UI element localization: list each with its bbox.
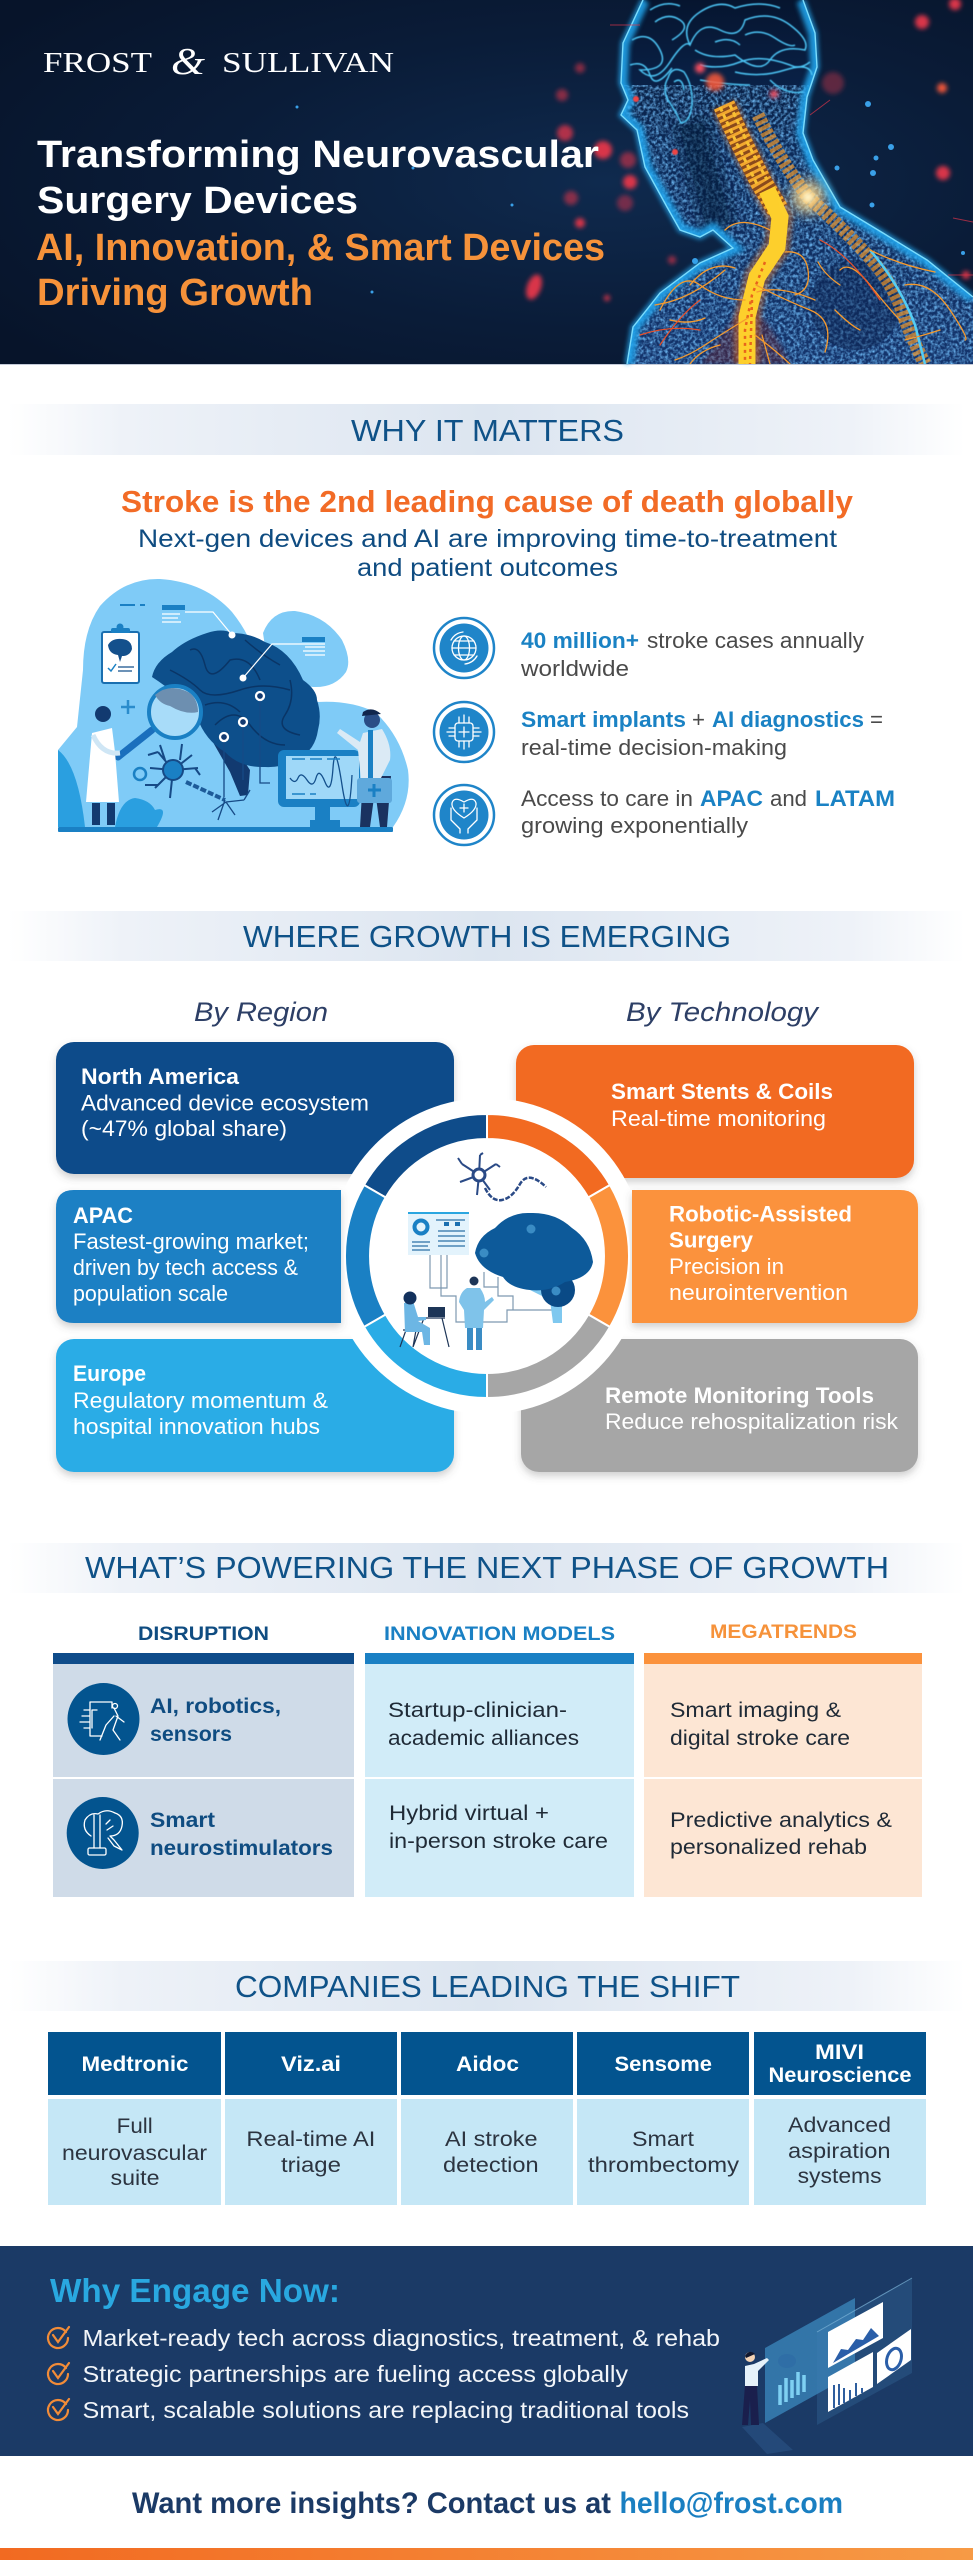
company names: Neuroscience xyxy=(768,2063,912,2087)
icon: neurostimulator xyxy=(67,1797,139,1869)
card: Smart Stents and Coils xyxy=(516,1045,914,1178)
illustration: doctors examining brain xyxy=(58,579,409,832)
stat: smart implants: AI diagnostics xyxy=(712,707,864,732)
stat: access to care: APAC xyxy=(700,786,763,811)
contact line xyxy=(132,2487,843,2520)
hub backing circle xyxy=(329,1098,645,1414)
wires xyxy=(430,1255,553,1322)
logo: Frost & Sullivan: FROST xyxy=(43,48,152,79)
company names: Medtronic xyxy=(82,2052,189,2076)
checklist xyxy=(48,2325,720,2423)
company names: Viz.ai xyxy=(281,2052,341,2076)
card: APAC xyxy=(56,1190,341,1323)
stat: smart implants: + xyxy=(692,707,705,732)
card: APAC: driven by tech access & xyxy=(73,1255,298,1280)
neurostimulators label: Smart xyxy=(150,1808,215,1832)
panel: innovation models: in-person stroke care xyxy=(389,1829,608,1853)
stat: smart implants: = xyxy=(870,707,883,732)
figure: left doctor xyxy=(86,706,120,825)
icon: AI robotics xyxy=(68,1683,140,1755)
section heading: where growth is emerging: WHERE GROWTH IS EMERGING xyxy=(243,919,731,954)
panel: disruption xyxy=(53,1624,354,1897)
headline: stroke statistic: Stroke is the 2nd leading cause of death globally xyxy=(121,484,854,519)
company descriptions: neurovascular xyxy=(62,2141,207,2165)
subheading xyxy=(138,525,837,582)
card: Europe: Europe xyxy=(73,1361,146,1386)
company descriptions: Smart xyxy=(632,2127,694,2151)
panel: why engage now xyxy=(0,2246,973,2456)
title: Transforming Neurovascular xyxy=(37,134,599,176)
section heading: companies: COMPANIES LEADING THE SHIFT xyxy=(235,1969,740,2004)
panel: megatrends: personalized rehab xyxy=(670,1835,867,1859)
stat: access to care xyxy=(434,785,895,845)
illustration: glowing human nervous system xyxy=(610,0,973,365)
card: Robotic-Assisted Surgery: neurointervention xyxy=(669,1280,848,1305)
card: Robotic-Assisted Surgery: Precision in xyxy=(669,1254,784,1279)
card: Remote Monitoring Tools: Reduce rehospitalization risk xyxy=(605,1409,899,1434)
panel: megatrends: MEGATRENDS xyxy=(710,1622,857,1643)
section heading: companies xyxy=(8,1961,965,2011)
stat: smart implants xyxy=(434,702,883,762)
title: AI, Innovation, & Smart Devices xyxy=(36,227,605,269)
company descriptions xyxy=(62,2113,891,2190)
column label: by technology: By Technology xyxy=(626,997,820,1027)
panel: megatrends xyxy=(644,1622,922,1897)
company names: Sensome xyxy=(614,2052,712,2076)
figure: standing doctor xyxy=(459,1276,494,1350)
card: Europe: hospital innovation hubs xyxy=(73,1414,320,1439)
stat: global stroke cases: 40 million+ xyxy=(521,628,639,653)
panel: innovation models: academic alliances xyxy=(388,1726,579,1750)
card: North America: Advanced device ecosystem xyxy=(81,1090,369,1116)
section heading: what's powering xyxy=(8,1543,965,1593)
company descriptions: Advanced xyxy=(788,2113,891,2137)
card: North America xyxy=(56,1042,454,1174)
hub: segmented ring xyxy=(345,1114,629,1398)
contact line: hello@frost.com xyxy=(620,2487,843,2520)
card: Smart Stents and Coils: Real-time monitoring xyxy=(611,1106,826,1131)
section heading: why it matters xyxy=(8,404,965,455)
AI robotics label: AI, robotics, xyxy=(150,1694,281,1718)
subheading: Next-gen devices and AI are improving time-to-treatment xyxy=(138,525,837,553)
callout labels xyxy=(120,604,325,655)
card: APAC: Fastest-growing market; xyxy=(73,1229,309,1254)
card: Remote Monitoring Tools: Remote Monitoring Tools xyxy=(605,1383,874,1408)
logo: Frost & Sullivan xyxy=(43,41,394,83)
stat: smart implants: Smart implants xyxy=(521,707,686,732)
card: Robotic-Assisted Surgery: Robotic-Assisted xyxy=(669,1202,852,1226)
company descriptions: aspiration xyxy=(788,2139,890,2163)
stat: access to care: and xyxy=(770,786,807,811)
icon: neuron xyxy=(458,1153,546,1200)
heading: Why Engage Now: xyxy=(50,2272,340,2309)
checklist: Smart, scalable solutions are replacing traditional tools xyxy=(82,2397,689,2423)
stat: global stroke cases: stroke cases annually xyxy=(647,628,864,653)
company descriptions: triage xyxy=(281,2153,341,2177)
panel: disruption: DISRUPTION xyxy=(138,1624,269,1645)
illustration: analyst with dashboards xyxy=(742,2278,912,2454)
icon: monitor xyxy=(278,750,360,827)
card: Europe xyxy=(56,1339,454,1472)
card: North America: North America xyxy=(81,1064,240,1089)
spinal cord xyxy=(724,105,780,364)
subheading: and patient outcomes xyxy=(357,554,618,582)
panel: innovation models: Hybrid virtual + xyxy=(389,1801,549,1825)
secondary nerve band xyxy=(758,115,925,364)
company descriptions: thrombectomy xyxy=(588,2153,739,2177)
card: Robotic-Assisted Surgery: Surgery xyxy=(669,1228,754,1252)
stat: access to care: Access to care in xyxy=(521,786,693,811)
company descriptions: suite xyxy=(110,2166,160,2190)
company descriptions: systems xyxy=(798,2164,882,2188)
stat: smart implants: real-time decision-making xyxy=(521,735,787,760)
card: Europe: Regulatory momentum & xyxy=(73,1388,328,1413)
title: Driving Growth xyxy=(37,272,313,314)
panel: megatrends: Smart imaging & xyxy=(670,1698,841,1722)
logo: Frost & Sullivan: SULLIVAN xyxy=(222,48,394,79)
brain xyxy=(152,630,320,796)
title: Surgery Devices xyxy=(37,180,358,222)
checklist: Market-ready tech across diagnostics, treatment, & rehab xyxy=(82,2325,720,2351)
card: Robotic-Assisted Surgery xyxy=(632,1190,918,1323)
panel: innovation models: Startup-clinician- xyxy=(388,1698,567,1722)
card: Remote Monitoring Tools xyxy=(521,1339,918,1472)
checklist: Strategic partnerships are fueling access globally xyxy=(82,2361,629,2387)
panel: innovation models: INNOVATION MODELS xyxy=(384,1624,615,1645)
stat: global stroke cases xyxy=(434,618,864,681)
brain xyxy=(475,1213,593,1323)
icon: clipboard xyxy=(102,624,139,683)
table: companies xyxy=(48,2032,926,2205)
title xyxy=(36,134,605,314)
icon: magnifying glass xyxy=(118,686,201,757)
stat list xyxy=(434,618,895,845)
figure: right doctor xyxy=(337,709,392,827)
company names: Aidoc xyxy=(456,2052,519,2076)
company names xyxy=(82,2040,912,2087)
logo: Frost & Sullivan: & xyxy=(171,41,206,83)
nerve branches xyxy=(640,222,966,364)
card: Smart Stents and Coils: Smart Stents & Coils xyxy=(611,1079,833,1104)
card: APAC: APAC xyxy=(73,1203,133,1228)
section heading: what's powering: WHAT’S POWERING THE NEXT PHASE OF GROWTH xyxy=(85,1550,889,1585)
company descriptions: Real-time AI xyxy=(246,2127,375,2151)
section heading: why it matters: WHY IT MATTERS xyxy=(351,413,624,448)
hub illustration: clinicians and brain xyxy=(400,1153,593,1350)
neuron xyxy=(134,744,250,820)
column label: by region: By Region xyxy=(194,997,328,1027)
dashboard board xyxy=(408,1212,469,1255)
panel: megatrends: digital stroke care xyxy=(670,1726,850,1750)
stat: access to care: LATAM xyxy=(815,786,895,811)
company names: MIVI xyxy=(815,2040,864,2064)
panel: innovation models xyxy=(365,1624,634,1897)
neurostimulators label: neurostimulators xyxy=(150,1836,333,1860)
neurostimulators label xyxy=(150,1808,333,1860)
contact line: Want more insights? Contact us at xyxy=(132,2487,611,2520)
panel: megatrends: Predictive analytics & xyxy=(670,1808,892,1832)
AI robotics label: sensors xyxy=(150,1722,232,1746)
card: APAC: population scale xyxy=(73,1281,228,1306)
company descriptions: Full xyxy=(117,2114,153,2138)
header banner xyxy=(0,0,973,365)
stat: access to care: growing exponentially xyxy=(521,813,748,838)
card: North America: (~47% global share) xyxy=(81,1116,287,1141)
stat: global stroke cases: worldwide xyxy=(520,656,629,681)
company descriptions: detection xyxy=(443,2153,539,2177)
figure: seated person xyxy=(400,1292,449,1347)
footer bar xyxy=(0,2548,973,2560)
callout lines and electrodes xyxy=(121,612,325,797)
section heading: where growth is emerging xyxy=(8,911,965,961)
company descriptions: AI stroke xyxy=(445,2127,538,2151)
ground line xyxy=(58,827,393,832)
AI robotics label xyxy=(150,1694,281,1746)
